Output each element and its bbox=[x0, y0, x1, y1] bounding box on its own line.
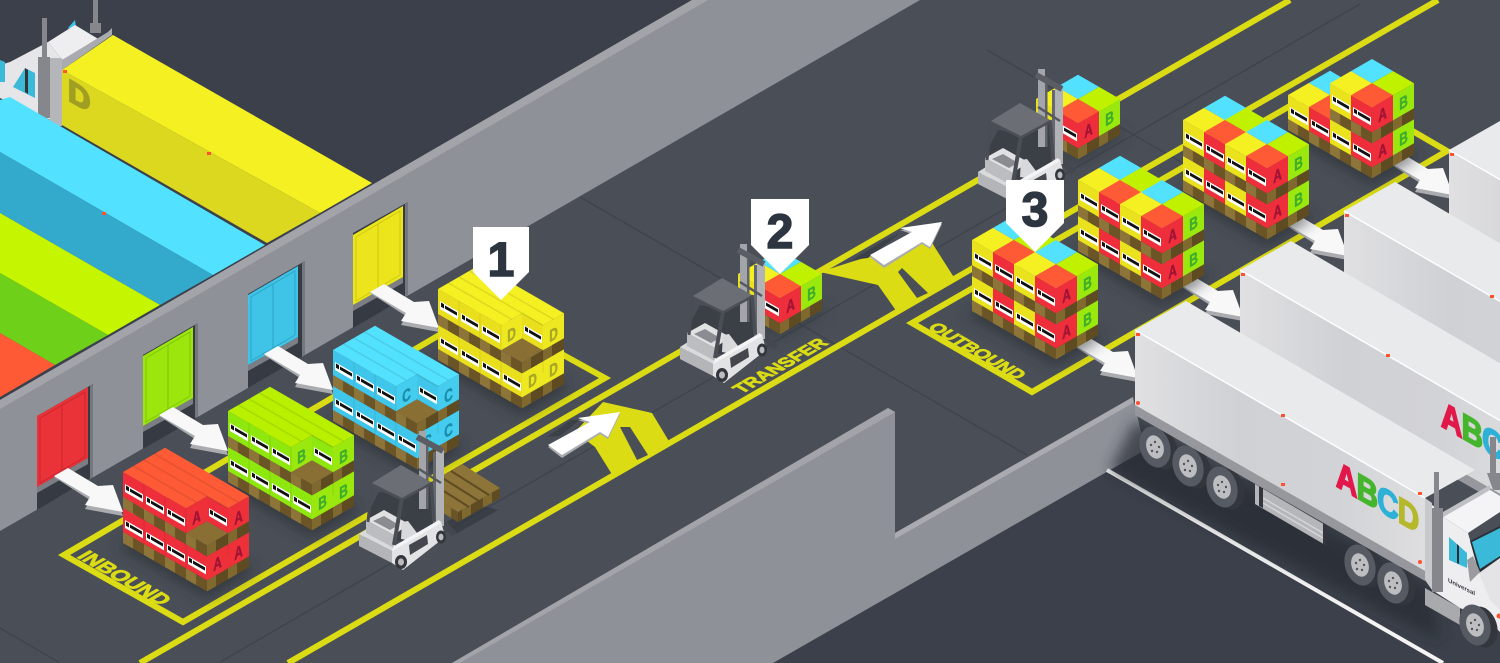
outbound stack second: B bbox=[1189, 248, 1198, 272]
pallet stack: green B: B bbox=[339, 445, 348, 469]
pallet stack: green B: B bbox=[318, 491, 327, 515]
pallet stack: yellow D: D bbox=[549, 358, 558, 382]
yellow trailer D: D bbox=[68, 73, 90, 120]
outbound stack first: A bbox=[1062, 284, 1071, 308]
trailer 2 with logo bbox=[1240, 241, 1500, 521]
outbound bay floor outline bbox=[912, 83, 1447, 392]
pallet stack: blue C: C bbox=[423, 430, 432, 454]
trailer 1 logo ABCD: ABCD bbox=[1336, 453, 1419, 542]
pallet stack: yellow D: D bbox=[528, 369, 537, 393]
dock door C blue bbox=[248, 266, 298, 371]
outbound stack first: B bbox=[1083, 272, 1092, 296]
outbound stack first: A bbox=[1062, 320, 1071, 344]
truck cab: Universal bbox=[1448, 577, 1475, 597]
pallet stack: red A bbox=[117, 448, 255, 598]
arrow: pallets to trailer 2 bbox=[1174, 273, 1243, 321]
load on forklift 3: A bbox=[1084, 119, 1093, 143]
forklift 2 bbox=[680, 244, 778, 383]
outbound stack second: A bbox=[1168, 224, 1177, 248]
arrow: transfer direction 1 bbox=[548, 412, 620, 458]
blue trailer C bbox=[0, 97, 265, 305]
pallet stack: yellow D: D bbox=[507, 323, 516, 347]
inbound bay floor outline bbox=[64, 310, 605, 622]
forklift 1 bbox=[359, 431, 457, 570]
outbound stack far bbox=[1282, 59, 1420, 185]
forklift 3 bbox=[978, 69, 1076, 208]
outbound stack second: B bbox=[1189, 212, 1198, 236]
floor label: inbound: INBOUND bbox=[72, 548, 176, 608]
dock door A red bbox=[37, 387, 88, 493]
outbound stack third: A bbox=[1273, 164, 1282, 188]
step marker 1 bbox=[473, 227, 529, 300]
step marker 1: 1 bbox=[488, 234, 514, 287]
transfer lane line lower bbox=[288, 0, 1438, 663]
outside yard behind the warehouse bbox=[0, 0, 692, 400]
yard white line bbox=[1107, 470, 1443, 663]
arrow: door B to pallets bbox=[159, 407, 228, 455]
outbound stack second: A bbox=[1168, 260, 1177, 284]
outbound stack third: A bbox=[1273, 200, 1282, 224]
step marker 2 bbox=[751, 199, 809, 274]
load on forklift 2 bbox=[738, 250, 828, 340]
trailer 1 wheels rear bbox=[1134, 422, 1250, 514]
outbound stack second bbox=[1072, 156, 1210, 306]
empty pallet bbox=[420, 464, 500, 534]
pallet stack: yellow D bbox=[432, 265, 570, 415]
dock door D yellow bbox=[353, 206, 403, 311]
floor label: transfer: TRANSFER bbox=[727, 335, 833, 396]
pallet stack: red A: A bbox=[192, 506, 201, 530]
pallet stack: green B: B bbox=[297, 445, 306, 469]
arrow: door A to pallets bbox=[54, 468, 123, 516]
trailer 1 bbox=[1135, 301, 1475, 581]
pallet stack: green B bbox=[222, 387, 360, 537]
pallet stack: blue C bbox=[327, 326, 465, 476]
outbound stack far: A bbox=[1378, 103, 1387, 127]
pallet stack: red A: A bbox=[234, 541, 243, 565]
arrow: door D to pallets bbox=[370, 284, 439, 332]
floor label: outbound: OUTBOUND bbox=[924, 320, 1031, 382]
front yard ground bbox=[773, 448, 1500, 663]
arrow: pallets to trailer 4 bbox=[1384, 151, 1453, 199]
inbound truck cab bbox=[0, 0, 112, 126]
red trailer A bbox=[0, 333, 55, 397]
yellow trailer D bbox=[62, 35, 372, 243]
outbound stack first: B bbox=[1083, 308, 1092, 332]
green trailer B bbox=[0, 213, 160, 365]
arrow: pallets to trailer 3 bbox=[1279, 212, 1348, 260]
lower warehouse wall bbox=[452, 397, 1145, 663]
outbound stack far: A bbox=[1378, 139, 1387, 163]
trailer shadow on ground bbox=[1110, 420, 1440, 640]
step marker 3: 3 bbox=[1022, 184, 1048, 237]
dock door B green bbox=[143, 327, 193, 432]
step marker 2: 2 bbox=[767, 206, 793, 259]
load on forklift 3: B bbox=[1105, 107, 1114, 131]
arrow: transfer direction 2 bbox=[870, 222, 942, 268]
arrow: door C to pallets bbox=[264, 346, 333, 394]
pallet stack: red A: A bbox=[213, 552, 222, 576]
step marker 3 bbox=[1006, 180, 1064, 252]
floor chevron 2 bbox=[820, 233, 955, 312]
load on forklift 2: A bbox=[786, 294, 795, 318]
pallet stack: green B: B bbox=[339, 480, 348, 504]
trailer 1 wheels front bbox=[1339, 540, 1421, 610]
load on forklift 2: B bbox=[807, 282, 816, 306]
outbound stack third bbox=[1177, 96, 1315, 246]
truck cab bbox=[1425, 472, 1500, 652]
outbound stack third: B bbox=[1294, 152, 1303, 176]
trailer 4 bbox=[1449, 121, 1500, 401]
pallet stack: blue C: C bbox=[402, 384, 411, 408]
outbound stack far: B bbox=[1399, 127, 1408, 151]
load on forklift 3 bbox=[1036, 75, 1126, 165]
trailer 1 side skirt bbox=[1255, 484, 1327, 546]
pallet stack: red A: A bbox=[234, 506, 243, 530]
arrow: pallets to trailer 1 bbox=[1069, 334, 1138, 382]
warehouse back wall with dock openings bbox=[0, 0, 920, 531]
outbound stack third: B bbox=[1294, 188, 1303, 212]
trailer 3 bbox=[1344, 182, 1500, 462]
transfer lane line upper bbox=[140, 0, 1290, 663]
floor chevron 1 bbox=[547, 402, 670, 476]
outbound stack first bbox=[966, 216, 1104, 366]
pallet stack: yellow D: D bbox=[549, 323, 558, 347]
pallet stack: blue C: C bbox=[444, 419, 453, 443]
pallet stack: blue C: C bbox=[444, 384, 453, 408]
outbound stack far: B bbox=[1399, 91, 1408, 115]
